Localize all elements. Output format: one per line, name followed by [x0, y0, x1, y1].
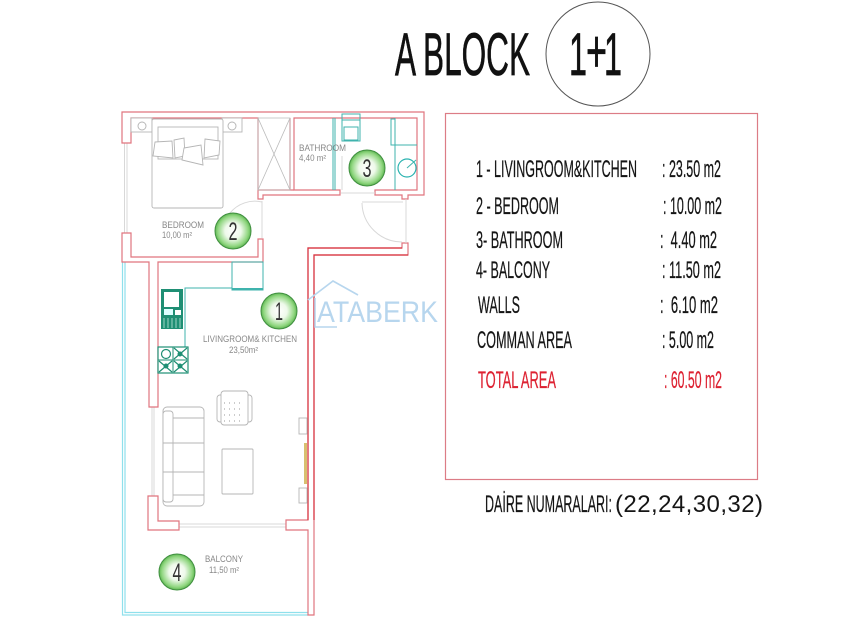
row: total area: TOTAL AREA: [478, 367, 556, 394]
armchair: [217, 391, 252, 425]
unit type badge: [546, 2, 650, 106]
room label: living room and kitchen: 23,50m²: [229, 345, 258, 355]
row: living room and kitchen: : 23.50 m2: [662, 156, 721, 183]
bed: [131, 118, 242, 208]
room label: bedroom: 10,00 m²: [162, 230, 192, 240]
row: bedroom: 2 - BEDROOM: [476, 193, 559, 220]
row: walls: : 6.10 m2: [660, 292, 718, 319]
floor plan: [122, 112, 438, 615]
room marker 4: [159, 554, 195, 590]
windows and balcony door: [124, 143, 286, 527]
room label: bedroom: [162, 220, 204, 240]
row: living room and kitchen: 1 - LIVINGROOM&KITCHEN: [476, 156, 637, 183]
watermark: [308, 281, 438, 329]
room label: balcony: BALCONY: [205, 554, 243, 564]
room label: balcony: [205, 554, 243, 575]
row: total area: [478, 367, 722, 394]
row: bathroom: 3- BATHROOM: [476, 227, 563, 254]
row: bedroom: : 10.00 m2: [663, 193, 722, 220]
unit type badge: 1: [569, 21, 587, 88]
room label: balcony: 11,50 m²: [209, 565, 239, 575]
tv unit and window: [299, 418, 307, 503]
row: common area: : 5.00 m2: [662, 327, 714, 354]
cooktop: [158, 347, 188, 373]
row: bathroom: [476, 227, 717, 254]
apartment numbers: (22,24,30,32): [615, 491, 763, 518]
row: balcony: : 11.50 m2: [662, 257, 721, 284]
room marker 3: [349, 150, 385, 186]
room marker 3: 3: [362, 155, 372, 183]
room label: living room and kitchen: LIVINGROOM& KITCHEN: [203, 334, 297, 344]
row: walls: [478, 292, 718, 319]
bathroom fixtures: [333, 114, 417, 190]
room marker 1: 1: [275, 298, 283, 326]
wardrobe: [258, 118, 290, 190]
row: common area: COMMAN AREA: [477, 327, 572, 354]
area table panel: [446, 114, 758, 480]
kitchen counter: [185, 262, 263, 347]
room marker 2: [215, 213, 251, 249]
room label: bathroom: [299, 143, 346, 163]
sofa: [163, 407, 204, 506]
unit type badge: +: [586, 18, 607, 85]
title: A BLOCK: [395, 21, 530, 88]
room label: living room and kitchen: [203, 334, 297, 355]
unit type badge: 1: [604, 21, 622, 88]
balcony glazing outline: [122, 262, 308, 615]
row: balcony: 4- BALCONY: [476, 257, 550, 284]
room label: bathroom: BATHROOM: [299, 143, 346, 153]
row: balcony: [476, 257, 721, 284]
row: bedroom: [476, 193, 722, 220]
row: bathroom: : 4.40 m2: [660, 227, 717, 254]
doors: [230, 156, 406, 243]
room label: bathroom: 4,40 m²: [299, 153, 326, 163]
row: walls: WALLS: [478, 292, 520, 319]
room marker 2: 2: [228, 218, 238, 246]
room marker 1: [261, 293, 297, 329]
walls: [122, 112, 424, 615]
coffee table: [222, 449, 253, 494]
apartment numbers: DAİRE NUMARALARI:: [485, 491, 612, 518]
room marker 4: 4: [172, 559, 182, 587]
row: total area: : 60.50 m2: [664, 367, 722, 394]
room label: bedroom: BEDROOM: [162, 220, 204, 230]
watermark: ATABERK: [317, 296, 438, 329]
kitchen sink: [161, 289, 183, 329]
